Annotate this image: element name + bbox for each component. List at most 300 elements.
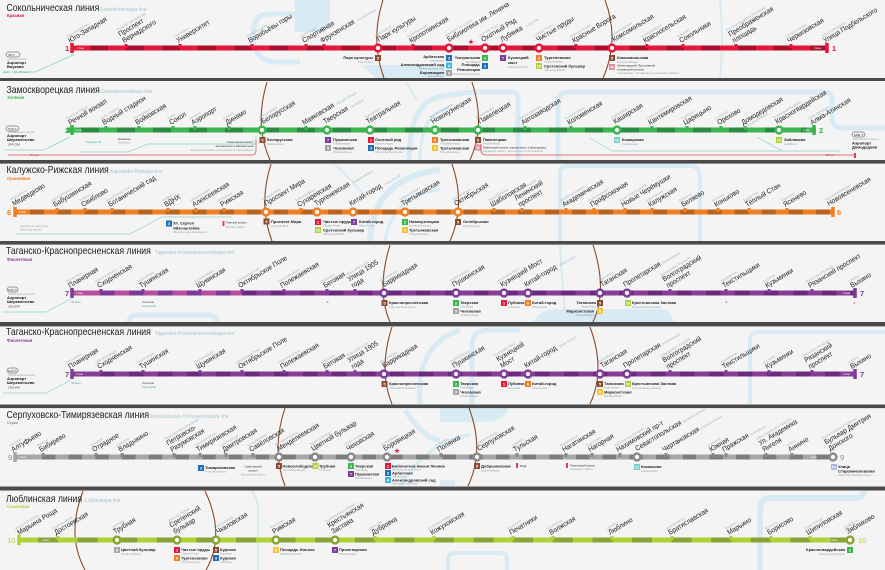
airport Sheremetyevo: Шереметьево <box>7 299 35 304</box>
heading: Lyublinskaya: Салатовая <box>7 504 30 509</box>
station labels: Чкаловская <box>215 511 249 536</box>
transfers: 10 <box>626 301 631 306</box>
station labels: Vykhino <box>847 274 860 284</box>
transfers: Tretyakovskaya <box>440 142 460 146</box>
transfers: 7 <box>350 472 353 477</box>
station labels: Lubyanka <box>525 17 540 28</box>
station labels: Kitay-Gorod <box>559 254 576 267</box>
transfers: 11 <box>635 465 640 470</box>
transfers: Арбатская <box>392 470 413 476</box>
station labels: Leninsky Prospekt <box>512 179 537 196</box>
line track: 7 <box>860 289 864 298</box>
transfers: Зябликово <box>784 137 806 142</box>
transfers: Ж <box>475 145 480 150</box>
line track: 2 <box>65 126 69 135</box>
station labels: Yuzhnaya <box>706 437 721 448</box>
station labels: Нагатинская <box>561 428 597 454</box>
station labels: площадь <box>731 24 759 45</box>
station labels: Южная <box>708 436 731 454</box>
heading: Lyublinskaya: Люблинская линия <box>6 493 82 505</box>
station labels: Savyolovskaya <box>246 433 268 448</box>
transfers: Leningradsky, Yaroslavsky and Kazansky stations <box>617 71 679 75</box>
airport Sheremetyevo <box>3 287 81 312</box>
station labels: Bibirevo <box>36 438 49 448</box>
station labels: Ulitsa Podbelskogo <box>820 20 847 39</box>
transfers: Ж <box>609 65 614 70</box>
transfers: 5 <box>383 382 386 387</box>
station labels: Oktyabrskoe Pole <box>235 266 260 284</box>
transfers: 6 <box>527 382 530 387</box>
station labels: Novokuznetskaya <box>428 102 453 120</box>
station labels: Сокол <box>168 111 188 127</box>
transfers: Marksistskaya <box>604 394 622 398</box>
station labels: Yasenevo <box>780 192 795 203</box>
station labels: Krestyanskaya Zastava <box>325 502 357 523</box>
station labels: Динамо <box>224 108 248 127</box>
station labels: Borovitskaya <box>380 433 399 447</box>
station labels: Трубная <box>112 516 138 536</box>
transfers: 5 <box>383 301 386 306</box>
station labels: Улица Подбельского <box>822 6 879 45</box>
transfers: 2 <box>404 220 407 225</box>
station labels: Марьина Роща <box>16 507 59 537</box>
station labels: Коньково <box>713 188 741 209</box>
airport Sheremetyevo and routes: Аэропорт <box>7 133 26 138</box>
transfers: Paveletsky station, Aeroexpress to Domodedovo <box>483 149 544 153</box>
station labels: проспект <box>665 269 693 290</box>
station labels: Ул. Академика <box>757 418 799 447</box>
airport Sheremetyevo <box>3 368 81 393</box>
line track: 2 мин <box>830 538 837 542</box>
station labels: Беговая <box>322 352 347 371</box>
station labels: Тургеневская <box>313 181 352 208</box>
station ticks and interchanges <box>57 207 787 217</box>
airport Sheremetyevo and routes: 35 мин <box>826 153 835 157</box>
station labels: Спортивная <box>301 20 336 45</box>
station labels: Tekstilshchiki <box>719 270 739 284</box>
station labels: Текстильщики <box>721 343 762 371</box>
station labels: Борисово <box>766 516 795 537</box>
transfers: Строгино <box>142 381 155 385</box>
transfers: 2 <box>484 56 487 61</box>
station labels: Volzhskaya <box>546 518 563 531</box>
transfers: Пролетарская <box>339 547 367 552</box>
transfers: 3 <box>484 64 487 69</box>
station labels: Свиблово <box>80 186 110 209</box>
transfers: Ул. Сергея <box>173 220 194 226</box>
transfers: 4 <box>387 478 390 483</box>
transfers: 9 <box>455 390 458 395</box>
station labels: Кузнецкий <box>495 340 526 363</box>
station labels: Nagatinskaya <box>559 434 579 448</box>
airport Sheremetyevo and routes: Sheremetyevo Airport <box>8 130 35 134</box>
transfers: Novoslobodskaya <box>283 468 306 472</box>
transfers: Савёловский вокзал, <box>227 140 254 144</box>
station labels: Китай-город <box>523 263 558 289</box>
station labels: Волжская <box>548 515 577 537</box>
transfers: Тургеневская <box>181 556 208 560</box>
station labels: Улица 1905 <box>346 340 380 364</box>
transfers: Краснопресненская <box>389 300 429 305</box>
station labels: Tushinskaya <box>136 270 155 284</box>
transfers: аэроэкспресс в Шереметьево <box>215 144 254 148</box>
transfers: Третьяковская <box>440 146 470 150</box>
station labels: Третьяковская <box>400 179 442 208</box>
airport Domodedovo: Аэропорт <box>852 140 871 146</box>
airport Vnukovo: Внуково <box>7 64 24 69</box>
station labels: проспект <box>665 350 693 371</box>
station labels: Китай-город <box>348 182 383 208</box>
station labels: Театральная <box>365 99 402 126</box>
station labels: Novye Cheryomushki <box>618 183 648 203</box>
transfers: 9 <box>455 309 458 314</box>
station labels: Серпуховская <box>476 425 516 453</box>
transfers: 11 <box>615 138 620 143</box>
station labels: проспект <box>807 350 835 371</box>
transfers: 1 <box>387 464 390 469</box>
transfers: Третьяковская <box>440 137 470 142</box>
station labels: Профсоюзная <box>589 180 630 209</box>
transfers: Крестьянская Застава <box>632 300 677 305</box>
transfers: Paveletskaya <box>483 142 500 146</box>
heading: Kaluzhsko-Rizhskaya <box>6 164 163 181</box>
station labels: Бабушкинская <box>52 179 93 209</box>
station labels: Turgenevskaya <box>351 169 373 185</box>
station labels: Dostoyevskaya <box>51 515 73 531</box>
station labels: Polezhaevskaya <box>277 349 301 365</box>
airport Sheremetyevo: Аэропорт <box>7 376 26 381</box>
station labels: Донского <box>827 432 855 453</box>
station labels: Медведково <box>11 182 47 208</box>
transfers: Парк культуры <box>343 55 374 60</box>
transfers: мост <box>508 60 518 65</box>
airport Sheremetyevo: SVO ✈ <box>8 288 18 292</box>
transfers: Строгино <box>142 300 155 304</box>
transfers: Chistye Prudy <box>181 552 199 556</box>
station labels: Shchukinskaya <box>193 349 215 365</box>
transfers: 3 <box>215 556 218 561</box>
station labels: Pushkinskaya <box>449 349 469 364</box>
station ticks and interchanges <box>106 125 784 135</box>
heading: Sokolnicheskaya <box>6 2 147 18</box>
station labels: Юго-Западная <box>67 16 109 45</box>
station labels: Планерная <box>67 347 100 371</box>
station labels: Mayakovskaya <box>336 91 357 106</box>
heading: Serpukhovsko-Timiryazevskaya: Серпуховско-Тимирязевская линия <box>6 409 149 421</box>
station labels: Tverskaya <box>349 98 365 109</box>
transfers: Chekhovskaya <box>460 394 479 398</box>
station labels: Dubrovka <box>368 520 383 531</box>
station labels: Сухаревская <box>296 183 333 209</box>
transfers: Myakinino <box>118 140 131 144</box>
station labels: Cherkizovskaya <box>784 23 807 39</box>
station labels: Севастопольская <box>634 419 683 453</box>
station labels: Rizhskaya <box>217 191 233 203</box>
line track: 1 <box>65 44 69 53</box>
heading: Kaluzhsko-Rizhskaya: Калужско-Рижская линия <box>6 164 109 176</box>
transfers: Park Kultury <box>358 60 374 64</box>
station labels: Чеховская <box>345 430 376 453</box>
transfers: 5 <box>599 301 602 306</box>
station labels: Kaluzhskaya <box>645 189 664 203</box>
heading: Lyublinskaya <box>6 493 121 509</box>
station labels: Skhodnenskaya <box>94 349 117 365</box>
airport Sheremetyevo: CDA SVF <box>8 386 20 390</box>
transfers: Кузнецкий <box>508 55 529 60</box>
station labels: Kolomenskaya <box>564 106 586 121</box>
airport Sheremetyevo: Sheremetyevo Airport <box>8 373 35 377</box>
transfers: 3 <box>168 221 171 226</box>
transfers: 8 <box>599 390 602 395</box>
station labels: проспект <box>517 188 545 209</box>
station labels: Sretensky Bulvar <box>167 506 191 523</box>
transfers: 1 <box>370 138 373 143</box>
transfers: Lubyanka <box>508 386 521 390</box>
transfers <box>142 381 677 398</box>
panel: Sokolnicheskaya line <box>3 0 879 78</box>
station labels: Sukharevskaya <box>294 187 316 203</box>
station labels: Taganskaya <box>597 351 615 364</box>
transfers: Taganskaya <box>604 386 619 390</box>
airport Vnukovo: ПЕ ✈ <box>8 53 16 57</box>
express route to bus: Автобус до аэропорта <box>20 224 49 228</box>
station labels <box>65 86 853 129</box>
transfers: Ulitsa Sergeya Eisensteina <box>173 230 207 234</box>
airport Sheremetyevo: CDA SVF <box>8 304 20 308</box>
station labels: Черкизовская <box>786 17 826 45</box>
line track <box>7 207 841 217</box>
transfers: Tretyakovskaya <box>440 150 460 154</box>
station labels: Университет <box>175 19 212 45</box>
line track: 1 <box>832 44 836 53</box>
transfers: Боровицкая <box>420 70 445 75</box>
station labels: Тимирязевская <box>195 424 238 454</box>
station labels: Kantemirovskaya <box>645 104 670 121</box>
transfers: Lubyanka <box>508 305 521 309</box>
heading: Kaluzhsko-Rizhskaya: Kaluzhsko-Rijskaya line <box>110 169 163 175</box>
heading: Tagansko-Krasnopresnenskaya: Фиолетовая <box>7 257 33 262</box>
station labels: Kuznetsky Most <box>494 342 516 357</box>
station labels: Paveletskaya <box>475 106 495 120</box>
station labels: Bulvar Dmitriya Donskogo <box>822 417 857 440</box>
station labels: Oktyabrskaya <box>451 188 471 202</box>
station labels: Пролетарская <box>622 342 662 370</box>
transfers: Китай-город <box>532 381 557 386</box>
station labels: Менделеевская <box>276 422 321 453</box>
transfers: Komsomolskaya <box>617 60 638 64</box>
airport Sheremetyevo and routes: 35 мин <box>30 153 39 157</box>
station labels: Profsoyuznaya <box>587 188 609 203</box>
transfers: Китай-город <box>532 300 557 305</box>
station labels <box>14 499 876 537</box>
station labels: Проспект <box>117 17 146 38</box>
station labels: Волгоградский <box>661 334 703 364</box>
station ticks and interchanges <box>101 288 812 298</box>
line track <box>8 452 844 462</box>
transfers: Площадь Ильича <box>280 547 315 552</box>
line track: 2 мин <box>843 291 850 295</box>
transfers: Чеховская <box>333 146 354 150</box>
station labels: Бульвар Дмитрия <box>823 413 873 446</box>
transfers: МЦД <box>520 464 526 468</box>
station labels: Polezhaevskaya <box>277 268 301 284</box>
transfers: Чистые пруды <box>323 219 353 224</box>
transfers: Октябрьская <box>463 219 489 224</box>
airport Sheremetyevo and routes: SVO ✈ <box>8 127 18 131</box>
station labels: Павелецкая <box>477 101 512 126</box>
station labels: Proletarskaya <box>661 332 681 346</box>
station labels: Altufyevo <box>8 437 22 448</box>
station labels: Oktyabrskoe Pole <box>235 347 260 365</box>
station labels: Тульская <box>512 433 540 454</box>
station labels: Voykovskaya <box>132 107 151 121</box>
station labels: Кропоткинская <box>408 16 450 45</box>
line track: 2 <box>819 126 823 135</box>
transfers: и Казанский вокзалы <box>617 68 644 72</box>
transfers: 5 <box>265 219 268 224</box>
transfers: Новослободская <box>282 464 317 468</box>
station labels: Кантемировская <box>647 95 694 127</box>
heading: Tagansko-Krasnopresnenskaya: Таганско-Краснопресненская линия <box>6 326 151 338</box>
transfers: Automobile <box>142 304 156 308</box>
transfers: Arbatskaya <box>392 474 406 478</box>
station ticks and interchanges <box>126 43 791 53</box>
station labels: Воробьёвы горы <box>247 12 294 45</box>
heading: Serpukhovsko-Timiryazevskaya: Serpukhovsko-Timiryazevskaya line <box>149 414 229 420</box>
transfers: 8 <box>275 548 278 553</box>
transfers: Savyolovsky station <box>241 472 266 476</box>
heading: Kaluzhsko-Rizhskaya: Оранжевая <box>7 176 31 181</box>
transfers: 5 <box>457 220 460 225</box>
transfers: Тургеневская <box>544 55 571 60</box>
station labels: Prazhskaya <box>749 424 766 437</box>
station labels <box>9 167 873 209</box>
airport Sheremetyevo and routes <box>4 126 856 158</box>
station labels: Академическая <box>561 178 605 209</box>
station labels: Чистые пруды <box>535 16 576 44</box>
transfers <box>142 300 856 317</box>
station labels: Мост <box>499 355 517 370</box>
station labels: Tushinskaya <box>136 351 155 365</box>
transfers: Arbatskaya <box>430 58 444 62</box>
station labels: Teatralnaya <box>363 107 381 120</box>
transfers: 5 <box>611 56 614 61</box>
transfers: Марксистская <box>604 390 632 394</box>
airport Sheremetyevo: SVO ✈ <box>8 369 18 373</box>
transfers: Тверская <box>460 300 479 305</box>
station labels: Avtozavodskaya <box>518 105 542 121</box>
transfers: Turgenevskaya <box>544 60 563 64</box>
station labels: Tsvetnoy Bulvar <box>308 431 332 447</box>
station labels: Kropotkinskaya <box>406 23 428 39</box>
station labels: Kuzminki <box>762 354 776 365</box>
station labels: Кожуховская <box>429 511 466 537</box>
line track: 2 мин <box>810 455 817 459</box>
transfers: 6 <box>527 301 530 306</box>
transfers: Сретенский бульвар <box>544 64 586 68</box>
transfers: Rizhsky station <box>226 225 245 229</box>
station labels: Lyublino <box>605 521 618 531</box>
station labels: Алексеевская <box>191 181 231 209</box>
heading: Zamoskvoretskaya: Замоскворецкая линия <box>6 84 100 96</box>
transfers: 8 <box>434 146 437 151</box>
line track: 6 <box>7 208 11 217</box>
station labels: Новокузнецкая <box>430 96 473 126</box>
airport Sheremetyevo: 35 мин <box>71 381 81 385</box>
station labels: Кузнецкий Мост <box>499 257 545 289</box>
station labels: Таганская <box>599 348 629 370</box>
transfers: Ж <box>853 301 856 305</box>
transfers: Л1 <box>831 465 837 470</box>
station labels: Belyaevo <box>678 192 692 203</box>
transfers: 6 <box>176 556 179 561</box>
line track <box>65 288 864 298</box>
heading: Sokolnicheskaya: Sokolnicheskaya line <box>100 7 147 13</box>
station labels: Новые Черёмушки <box>620 173 672 209</box>
station labels: Skhodnenskaya <box>94 268 117 284</box>
line track: 9 <box>8 453 12 462</box>
station labels: Полянка <box>436 434 462 454</box>
station labels: Фрунзенская <box>319 18 356 45</box>
station labels: Vorobyovy Gory <box>245 23 268 39</box>
transfers: Лубянка <box>508 381 525 386</box>
station labels: Автозаводская <box>520 97 562 127</box>
station labels: Shchukinskaya <box>193 268 215 284</box>
transfers <box>166 218 489 236</box>
airport Domodedovo: Domodedovo Airport <box>853 137 879 141</box>
station labels: Krasnoselskaya <box>640 23 663 39</box>
station labels: Сретенский <box>168 504 202 529</box>
station labels: Беляево <box>680 189 706 209</box>
transfers: 3 <box>370 146 373 151</box>
station labels: Preobrazhenskaya Ploshchad <box>726 6 766 32</box>
line track: 9 <box>840 453 844 462</box>
transfers: Старокачаловская <box>838 468 875 474</box>
line track: 2 мин <box>19 455 26 459</box>
airport Sheremetyevo: Sheremetyevo Airport <box>8 292 35 296</box>
station labels: ★ <box>468 39 474 46</box>
transfers: Александровский сад <box>392 478 436 482</box>
station labels: Dmitrovskaya <box>219 434 239 448</box>
transfers: Krasnopresnenskaya <box>389 305 416 309</box>
station labels: Римская <box>271 516 297 536</box>
station labels: Vladykino <box>115 437 130 448</box>
station labels: Коломенская <box>566 100 604 127</box>
station labels: Проспект Мира <box>263 178 307 208</box>
panel: Tagansko-Krasnopresnenskaya line (second) <box>3 326 873 398</box>
station labels: Войковская <box>134 102 168 127</box>
station labels: Shipilovskaya <box>803 517 823 531</box>
transfers: Kashirskaya <box>622 142 638 146</box>
airport Sheremetyevo: Аэропорт <box>7 295 26 300</box>
station labels: Полежаевская <box>279 342 321 371</box>
station labels: Dinamo <box>222 111 235 121</box>
station labels: Maryina Roshcha <box>14 514 39 531</box>
heading: Tagansko-Krasnopresnenskaya: Tagansko-Krasnopresnenskaya line <box>155 331 234 337</box>
station labels: Universitet <box>173 27 189 39</box>
transfers: Площадь <box>462 62 481 67</box>
transfers: Aleksandrovsky Sad <box>392 482 418 486</box>
transfers: Biblioteka imeni Lenina <box>392 468 421 472</box>
station labels: Тушинская <box>138 348 170 371</box>
station labels: Barrikadnaya <box>379 350 399 364</box>
line track <box>65 369 864 379</box>
station labels: Sportivnaya <box>299 26 317 39</box>
station labels: Красные Ворота <box>571 13 617 45</box>
station labels: Достоевская <box>53 511 90 537</box>
line track <box>65 43 836 53</box>
station labels: Улица 1905 <box>346 259 380 283</box>
